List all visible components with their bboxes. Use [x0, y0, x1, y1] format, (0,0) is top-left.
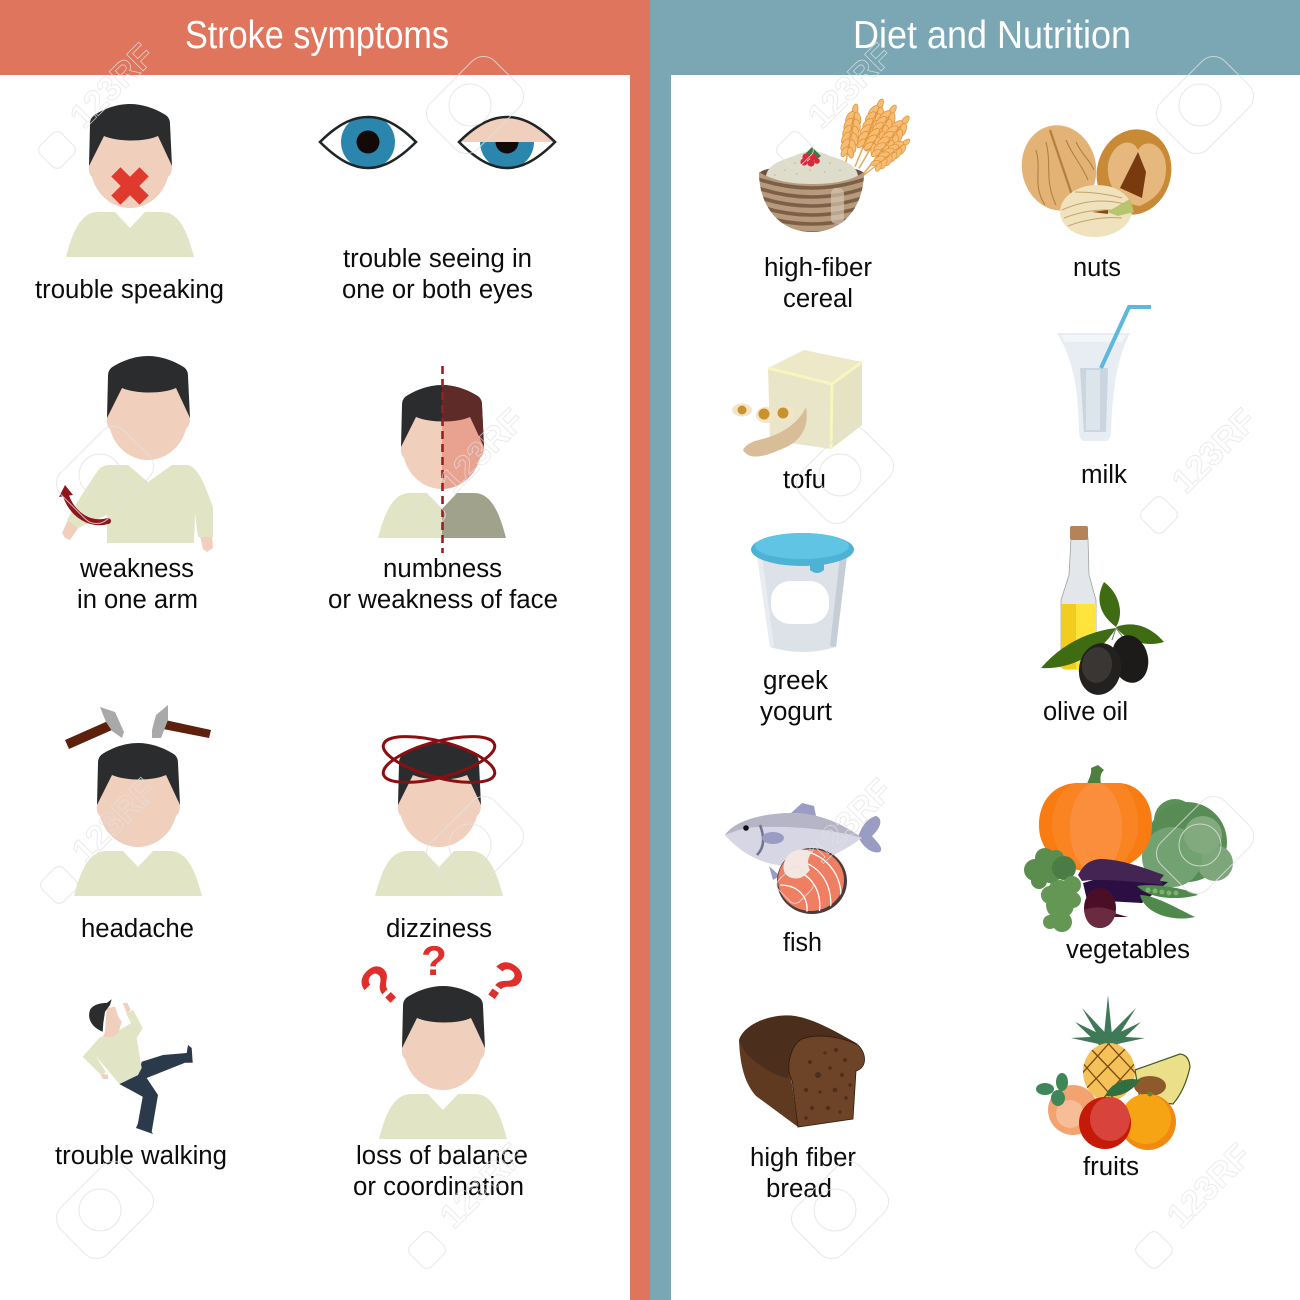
heading: stroke symptoms: Stroke symptoms: [185, 14, 449, 57]
icon: broccoli: [1024, 848, 1081, 932]
icon: trouble speaking: [66, 104, 194, 257]
icon: apple: [1079, 1097, 1131, 1149]
label: vegetables: vegetables: [1066, 936, 1190, 964]
icon: olive oil: [1041, 526, 1164, 698]
label: trouble seeing: trouble seeing in: [343, 245, 532, 273]
label: milk: milk: [1081, 461, 1127, 489]
icon: high-fiber cereal: [755, 95, 916, 233]
label: greek yogurt: greek: [763, 667, 828, 695]
icon: fish: [725, 803, 881, 920]
icon: question marks: ?: [421, 937, 447, 984]
label: numbness: numbness: [383, 555, 502, 583]
watermark overlay: 123RF: [801, 772, 900, 871]
icon: weakness in one arm: [59, 356, 213, 552]
icon: cabbage: [1142, 799, 1233, 887]
label: high-fiber cereal: cereal: [783, 285, 853, 313]
label: weakness in one arm: [77, 555, 198, 614]
label: loss of balance: or coordination: [353, 1173, 524, 1201]
icon: peach: [1048, 1085, 1098, 1135]
icon: pumpkin: [1039, 765, 1152, 873]
icon: beetroot: [1084, 888, 1128, 928]
icon: avocado: [1134, 1054, 1190, 1104]
watermark overlay: 123RF: [1165, 402, 1264, 501]
heading: diet and nutrition: Diet and Nutrition: [853, 14, 1131, 57]
label: trouble seeing: [342, 245, 533, 304]
icon: salmon steak: [777, 848, 847, 920]
icon: greek yogurt: [751, 533, 854, 652]
label: weakness in one arm: in one arm: [77, 586, 198, 614]
icon: trouble walking: [83, 999, 193, 1134]
watermark overlay: 123RF: [801, 37, 900, 136]
icon: milk glass: [1057, 307, 1151, 441]
label: headache: headache: [81, 915, 194, 943]
label: loss of balance: [353, 1142, 528, 1201]
watermark overlay: 123RF: [63, 37, 162, 136]
label: loss of balance: loss of balance: [356, 1142, 528, 1170]
watermark overlay: 123RF: [1160, 1137, 1259, 1236]
watermark overlay: 123RF: [433, 1137, 532, 1236]
icon: peas: [1137, 885, 1198, 919]
icon: orange: [1120, 1092, 1176, 1150]
label: trouble speaking: trouble speaking: [35, 276, 224, 304]
label: high fiber bread: bread: [766, 1175, 832, 1203]
label: tofu: tofu: [783, 466, 826, 494]
label: fruits: fruits: [1083, 1153, 1139, 1181]
watermark overlay: 123RF: [433, 402, 532, 501]
icon: tofu: [732, 350, 862, 457]
label: high fiber bread: high fiber: [750, 1144, 857, 1172]
icon: question marks: ?: [346, 951, 415, 1020]
label: greek yogurt: yogurt: [760, 698, 832, 726]
icon: nuts: [1014, 118, 1180, 239]
label: high fiber bread: [750, 1144, 857, 1203]
icon: soy beans: [732, 404, 807, 457]
icon: high fiber bread: [739, 1015, 865, 1127]
label: numbness: or weakness of face: [328, 586, 558, 614]
panel: stroke symptoms: [0, 0, 650, 1300]
label: nuts: nuts: [1073, 254, 1121, 282]
label: high-fiber cereal: [764, 254, 873, 313]
icon: numbness of face: [378, 366, 506, 553]
icon: fruits: [1036, 995, 1190, 1150]
icon: right hammer: [152, 705, 211, 738]
arrow: arm falling: [59, 485, 108, 522]
label: numbness: [328, 555, 558, 614]
icon: loss of balance: [346, 937, 536, 1139]
icon: eyes: [318, 116, 557, 170]
icon: left hammer: [65, 707, 124, 749]
icon: red cross over mouth: [111, 167, 149, 205]
icon: question marks: [346, 937, 536, 1020]
label: fish: fish: [783, 929, 822, 957]
icon: eggplant: [1078, 859, 1168, 903]
watermark overlay: 123RF: [65, 772, 164, 871]
label: trouble walking: trouble walking: [55, 1142, 227, 1170]
label: trouble seeing: one or both eyes: [342, 276, 533, 304]
icon: leaves: [1036, 1073, 1140, 1106]
label: olive oil: olive oil: [1043, 698, 1128, 726]
panel: diet and nutrition: [650, 0, 1300, 1300]
icon: headache: [65, 705, 211, 896]
label: weakness in one arm: weakness: [79, 555, 194, 583]
label: dizziness: dizziness: [386, 915, 492, 943]
icon: dizziness: [375, 727, 503, 896]
icon: vegetables: [1024, 765, 1233, 932]
icon: pineapple: [1071, 995, 1145, 1102]
icon: question marks: ?: [472, 946, 536, 1017]
label: greek yogurt: [760, 667, 832, 726]
label: high-fiber cereal: high-fiber: [764, 254, 873, 282]
